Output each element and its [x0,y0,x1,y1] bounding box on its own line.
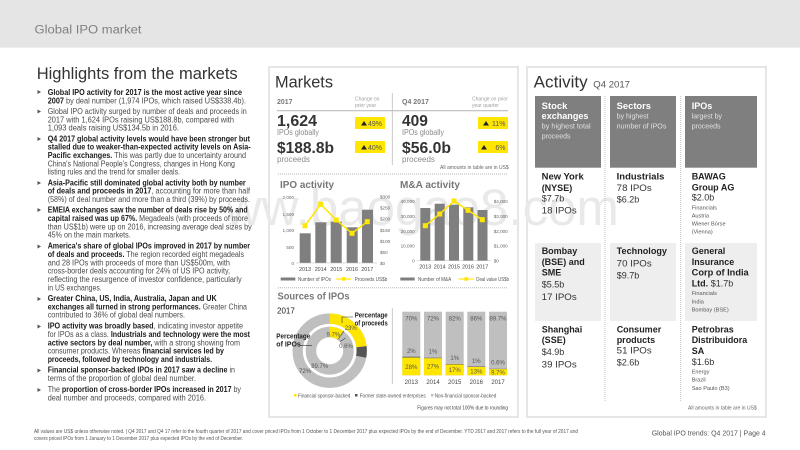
chart: M&A activity: 2016 [462,264,474,270]
row 1: Industrials: $6.2b [617,195,639,205]
bullet text: Asia-Pacific still dominated global activity both by number [48,178,246,187]
chart: IPO activity: $150 [380,228,391,233]
panel: markets frame [269,67,518,417]
row 1: Industrials: Industrials [617,171,664,181]
chart: sources stacked bars: 2014 [426,380,440,386]
chart: sources stacked bars: 1% [429,350,438,356]
row 2 backgrounds [535,243,757,321]
watermark: www.baogao8.com [187,179,619,236]
chart: sources donut: 89.7% [311,364,329,370]
row 3: Shanghai: Shanghai [542,324,582,334]
heading: M&A activity: M&A activity [400,180,460,191]
row 2: Technology: 70 IPOs [617,259,652,269]
chart: sources stacked bars: 2016 [470,380,484,386]
stats: Q4 2017: $56.0b [402,140,451,157]
note: amounts: All amounts in table are in US$ [440,165,509,171]
footnote: covers priced IPOs from 1 January to 1 December 2017 plus expected IPOs by the end of December. [34,436,243,442]
column header: IPOs [685,96,757,168]
row 1: BAWAG: Group AG [692,183,734,193]
row 1: New York: New York [542,171,585,181]
stats: Q4 2017: Change on prior [472,96,508,102]
row 2: General Insurance: India [692,299,705,305]
row 3: Shanghai: (SSE) [542,335,566,345]
bullet text: Global IPO activity for 2017 is the most active year since [48,88,242,97]
chart: IPO activity: Number of IPOs [298,277,331,283]
column header: IPOs: proceeds [692,123,721,130]
row 2: Bombay: 17 IPOs [542,292,577,302]
bullet text: The proportion of cross-border IPOs increased in 2017 by [48,385,241,394]
bullet text: 1,093 deals raising US$134.5b in 2016. [48,124,179,133]
stats: 2017 [277,96,385,164]
chart: IPO activity: 2013 [299,267,311,273]
row 3: Shanghai: $4.9b [542,347,564,357]
chart: M&A activity: 2015 [448,264,460,270]
bullet text: deal number and proceeds, compared with 2016. [48,393,206,402]
bullet text: stalled due to weaker-than-expected activity levels on Asia- [48,143,251,152]
chart: M&A activity: Deal value US$b [476,277,509,283]
chart: M&A activity [400,198,509,283]
panel: activity content [534,72,757,411]
bullet text: contributed to 36% of global deal numbers. [48,311,185,320]
column header: IPOs: largest by [692,114,723,121]
heading: sources of IPOs: Sources of IPOs [278,291,350,302]
bullet text: proceeds, followed by technology and industrials. [48,355,212,364]
bullet text: capital raised was up 67%. Megadeals (with proceeds of more [48,214,248,223]
heading: Q4 2017: Q4 2017 [593,79,630,89]
chart: M&A activity: $3,000 [494,214,508,219]
footnote [34,429,578,442]
bullet text: Greater China, US, India, Australia, Japan and UK [48,294,217,303]
bullet text: EMEIA exchanges saw the number of deals rise by 50% and [48,206,248,215]
chart: sources stacked bars: 70% [405,316,418,322]
chart: sources donut: Percentage [276,334,310,341]
chart: M&A activity: 20,000 [401,229,415,234]
stats: Q4 2017: Q4 2017 [402,99,429,106]
column header: sectors [610,96,676,168]
heading: markets: Markets [275,73,333,92]
row 3: Petrobras: Brazil [692,378,706,384]
chart: sources stacked bars: 86% [470,316,483,322]
row 1: Industrials: 78 IPOs [617,183,652,193]
row 2: Bombay: SME [542,268,561,278]
bullet text [48,88,252,402]
chart: sources stacked bars: 2013 [405,380,419,386]
row 2: Technology: $9.7b [617,270,639,280]
legend: sources [294,393,496,399]
bullet text: 45% on the main markets. [48,231,131,240]
row 1: BAWAG: Wiener Börse [692,222,726,228]
heading: IPO activity: IPO activity [280,180,334,191]
stats: 2017: proceeds [277,155,310,164]
chart: sources donut: 5% [358,351,367,357]
chart: sources stacked bars [402,312,507,386]
row 2: General Insurance [692,246,750,314]
bullet text: and 28 IPOs with proceeds of more than US$500m, with [48,258,230,267]
stats: Q4 2017: 409 [402,113,428,130]
row 2: Bombay: $5.5b [542,280,564,290]
bullet text: China's National People's Congress, changes in Hong Kong [48,159,235,168]
row 2: General Insurance: Ltd. $1.7b [692,279,733,289]
chart: sources stacked bars: 2015 [448,380,462,386]
header band [0,0,800,48]
bullet text: than US$1b) were up on 2016, increasing average deal sizes by [48,222,252,231]
chart: IPO activity: $0 [380,261,386,266]
chart: M&A activity: 2017 [476,264,488,270]
row 2: Technology [617,246,667,280]
row 2: General Insurance: Corp of India [692,268,750,278]
row 3: Petrobras: $1.6b [692,357,714,367]
heading: activity: Activity [534,72,588,91]
chart: sources stacked bars: 28% [405,365,418,371]
chart: sources donut: of proceeds [355,321,388,328]
stats: 2017: 40% [368,145,382,152]
chart: IPO activity: 2016 [346,267,358,273]
chart: sources donut: of IPOs [276,342,301,349]
bullet text: reflecting the resurgence of investor confidence, particularly [48,275,242,284]
chart: sources stacked bars: 13% [470,370,483,376]
row 3: Petrobras: Distribuidora [692,335,748,345]
chart: sources stacked bars: 82% [449,316,461,322]
chart: IPO activity: $250 [380,206,391,210]
heading: highlights: Highlights from the markets [37,64,238,83]
bullet text: exchanges all turned in strong performances. Greater China [48,302,247,311]
stats: Q4 2017: proceeds [402,155,435,164]
chart: IPO activity: Proceeds US$b [355,277,387,283]
column header: sectors: by highest [617,114,649,121]
bullet text: listing rules and the trend for smaller deals. [48,168,180,177]
bullet text: of deals and proceeds. The region recorded eight megadeals [48,250,244,259]
chart: M&A activity: Number of M&A [418,277,452,283]
chart: M&A activity: $0 [494,258,499,264]
bullet text: IPO activity was broadly based, indicating investor appetite [48,322,243,331]
chart: sources stacked bars: 2% [407,349,416,355]
chart: M&A activity: 0 [412,258,415,264]
column header: stock exchanges: by highest total [542,124,591,131]
stats: Q4 2017 [402,96,508,164]
column header: stock exchanges: proceeds [542,133,571,140]
row 3: Consumer products: Consumer [617,324,662,334]
chart: M&A activity: 10,000 [401,244,415,248]
chart: M&A activity: 2013 [419,264,431,270]
row 2: General Insurance: Bombay (BSE) [692,308,729,314]
bullet text: America's share of global IPOs improved in 2017 by number [48,242,250,251]
chart: sources stacked bars: 89.7% [489,316,507,322]
chart: IPO activity: $50 [380,250,388,255]
bullet text: active sectors by deal number, with a strong showing from [48,338,240,347]
row 1: BAWAG: $2.0b [692,193,714,203]
stats: 2017: prior year [355,103,376,109]
row 1: BAWAG: (Vienna) [692,230,713,236]
chart: IPO activity: 0 [291,261,294,266]
bullet text: Global IPO activity surged by number of deals and proceeds in [48,107,247,116]
chart: sources donut: Percentage [355,313,388,320]
bullet text: 2007 by deal number (1,974 IPOs, which raised US$338.4b). [48,96,246,105]
bullet text: consumer products. Whereas financial services led by [48,347,224,356]
row 3: Consumer products: $2.6b [617,358,639,368]
chart: sources donut [276,306,388,383]
column header: stock exchanges: Stock [542,101,568,111]
stats: Q4 2017: IPOs globally [402,128,444,137]
row 1: New York: $7.7b [542,193,564,203]
chart: M&A activity: 40,000 [401,199,415,204]
chart: sources stacked bars: 0.6% [491,360,505,366]
chart: sources donut: 2017 [277,306,295,315]
chart: sources stacked bars: 27% [427,364,440,370]
bullet text: Financial sponsor-backed IPOs in 2017 saw a decline in [48,366,235,375]
chart: IPO activity: 2015 [330,267,342,273]
chart: sources donut: 72% [299,369,312,375]
column header: sectors: number of IPOs [617,123,667,130]
stats: 2017: 1,624 [277,113,317,130]
row 2: General Insurance: Financials [692,291,717,297]
footer: page reference: Global IPO trends: Q4 2017 | Page 4 [652,429,766,438]
chart: sources stacked bars: 2017 [491,380,505,386]
chart: sources donut: 23% [345,326,357,332]
bullet text: in US exchanges. [48,283,102,292]
row 3: Consumer products: products [617,335,655,345]
chart: IPO activity: $200 [380,216,391,222]
panel: highlights from the markets [37,64,252,402]
stats: 2017: IPOs globally [277,128,319,137]
stats: 2017: Change on [355,96,380,102]
stats: Q4 2017: 6% [495,145,506,152]
stats: Q4 2017: 11% [492,121,506,128]
chart: M&A activity: 30,000 [401,214,415,219]
chart: IPO activity: 1,500 [282,212,294,217]
row 1: BAWAG: Financials [692,205,717,211]
bullet text: (58%) of deal number and more than a third (39%) by proceeds. [48,195,250,204]
row 3: Shanghai [542,324,582,369]
bullet markers [38,90,41,392]
stats: 2017: 49% [368,121,382,128]
row 1: BAWAG: BAWAG [692,171,726,181]
chart: IPO activity [281,194,391,283]
row 2: Technology: Technology [617,246,667,256]
chart: sources stacked bars: 17% [449,368,461,374]
chart: sources stacked bars: 72% [427,316,440,322]
row 3: Consumer products: 51 IPOs [617,345,652,355]
row 1: New York [542,171,585,215]
row 3: Petrobras: Energy [692,370,710,376]
bullet text: 2017 with 1,624 IPOs raising US$188.8b, compared with [48,115,234,124]
chart: IPO activity: 1,000 [282,228,294,233]
chart: M&A activity: $4,000 [494,199,508,204]
chart: IPO activity: $300 [380,194,391,200]
legend: sources: Former state-owned enterprises [360,393,426,399]
column header: sectors: Sectors [617,101,651,111]
stats: 2017: 2017 [277,99,293,106]
stats: 2017: $188.8b [277,140,334,157]
header band: Global IPO market [34,24,142,36]
row 3: Petrobras: SA [692,346,705,356]
row 1: New York: (NYSE) [542,183,572,193]
column header: stock exchanges [535,96,601,168]
bullet text: of deals and proceeds in 2017, accounting for more than half [48,187,251,196]
row 3: Shanghai: 39 IPOs [542,359,577,369]
row 2: Bombay [542,246,585,302]
bullet text: cross-border deals accounting for 24% of US IPO activity, [48,267,230,276]
legend: sources: Non-financial sponsor-backed [435,393,496,399]
row 1: Industrials [617,171,664,205]
footnote: All values are US$ unless otherwise noted. | Q4 2017 and Q4 17 refer to the fourth quarter of 2017 and cover priced IPOs from 1 October to 1 December 2017 plus expected IPOs by the end of December. YTD 2017 and 2017 refers to the full year of 2017 and [34,429,578,435]
panel: activity frame [527,67,766,417]
legend: sources: Financial sponsor-backed [298,393,350,399]
panel: markets content [275,73,509,411]
chart: sources donut: 9.7% [326,332,341,338]
chart: sources stacked bars: 1% [472,359,481,365]
bullet text: Pacific exchanges. This was partly due to uncertainty around [48,151,246,160]
chart: IPO activity: 2014 [315,267,327,273]
row 2: General Insurance: Insurance [692,257,734,267]
stats: Q4 2017: year quarter [472,103,499,109]
row 3: Consumer products [617,324,662,368]
chart: IPO activity: 2,000 [282,195,294,200]
chart: sources stacked bars: 9.7% [491,370,505,376]
chart: IPO activity: 2017 [361,267,373,273]
chart: IPO activity: 500 [286,245,294,250]
chart: M&A activity: $2,000 [494,229,508,234]
bullet text: for IPOs as a class. Industrials and technology were the most [48,330,250,339]
row 2: Bombay: (BSE) and [542,257,585,267]
chart: M&A activity: 2014 [434,264,446,270]
row 2: Bombay: Bombay [542,246,577,256]
chart: sources stacked bars: 1% [450,356,460,362]
row 1: New York: 18 IPOs [542,205,577,215]
row 3: Petrobras: Sao Paulo (B3) [692,386,730,392]
row 3: Petrobras: Petrobras [692,324,734,334]
chart: IPO activity: $100 [380,239,391,244]
row 2: General Insurance: General [692,246,725,256]
row 3: Petrobras [692,324,748,392]
column header: IPOs: IPOs [692,101,712,111]
row 1: BAWAG [692,171,734,236]
chart: sources donut: 0.6% [339,344,353,350]
note: amounts: All amounts in table are in US$ [688,405,757,411]
bullet text: Q4 2017 global activity levels would have been stronger but [48,134,250,143]
chart: M&A activity: $1,000 [494,244,508,248]
row 1: BAWAG: Austria [692,214,710,220]
bullet text: terms of the proportion of global deal number. [48,374,196,383]
note: rounding: Figures may not total 100% due to rounding [417,405,508,411]
column header: stock exchanges: exchanges [542,111,588,121]
